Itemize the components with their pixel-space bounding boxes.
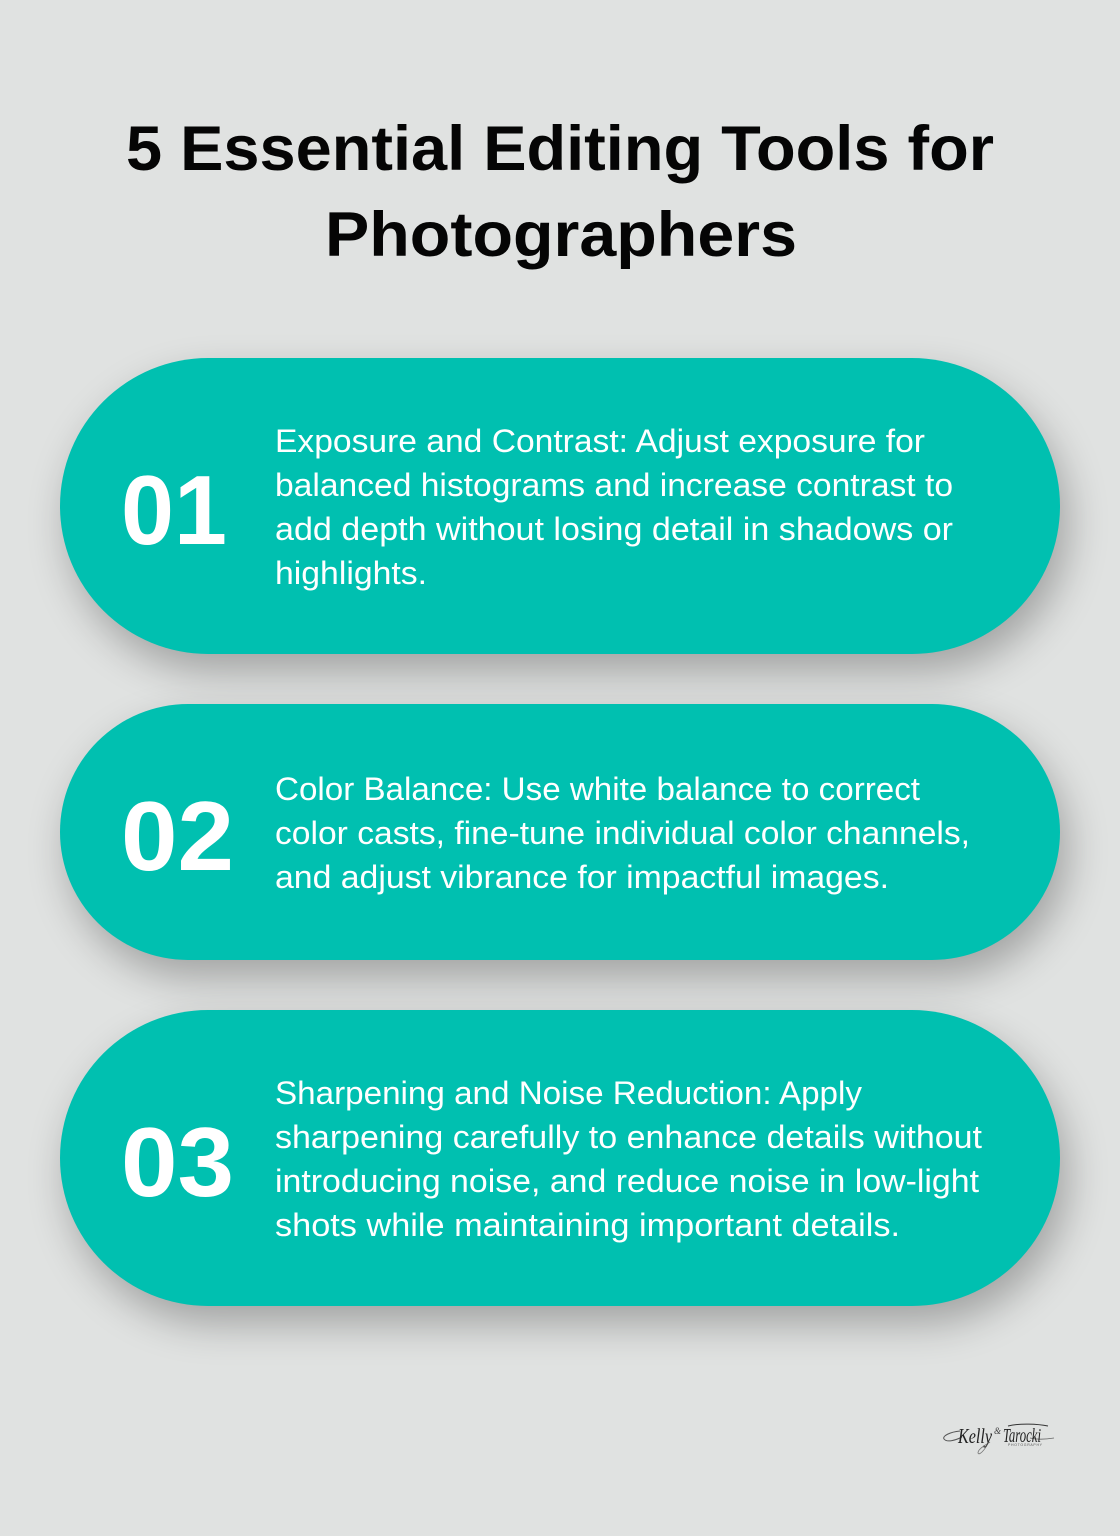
title: 5 Essential Editing Tools for [126,114,994,184]
text block: color balance [275,771,970,895]
number 01: 01 [121,455,227,565]
text block: exposure and contrast [275,423,953,591]
text block: color balance: and adjust vibrance for impactful images. [275,859,889,895]
text block: sharpening and noise reduction: introducing noise, and reduce noise in low-light [275,1163,979,1199]
logo: Kelly & Tarocki Photography signature: Kelly [957,1424,993,1448]
text block: sharpening and noise reduction [275,1075,982,1243]
logo: Kelly & Tarocki Photography signature: Tarocki [1003,1425,1041,1447]
text block: sharpening and noise reduction: shots while maintaining important details. [275,1207,900,1243]
text block: exposure and contrast: highlights. [275,555,427,591]
panel: step 02 pill [60,704,1060,960]
logo: Kelly & Tarocki Photography signature: PHOTOGRAPHY [1008,1443,1043,1447]
text block: exposure and contrast: balanced histograms and increase contrast to [275,467,953,503]
title [126,114,994,270]
text block: color balance: color casts, fine-tune individual color channels, [275,815,970,851]
text block: sharpening and noise reduction: Sharpening and Noise Reduction: Apply [275,1075,862,1111]
text block: sharpening and noise reduction: sharpening carefully to enhance details without [275,1119,982,1155]
number 02: 02 [121,781,234,891]
text block: color balance: Color Balance: Use white balance to correct [275,771,920,807]
logo: Kelly & Tarocki Photography signature [944,1424,1054,1454]
title: Photographers [325,200,797,270]
number 03: 03 [121,1107,234,1217]
text block: exposure and contrast: add depth without losing detail in shadows or [275,511,953,547]
panel: step 01 pill [60,358,1060,654]
panel: step 03 pill [60,1010,1060,1306]
text block: exposure and contrast: Exposure and Contrast: Adjust exposure for [275,423,925,459]
logo: Kelly & Tarocki Photography signature: & [994,1426,1001,1436]
